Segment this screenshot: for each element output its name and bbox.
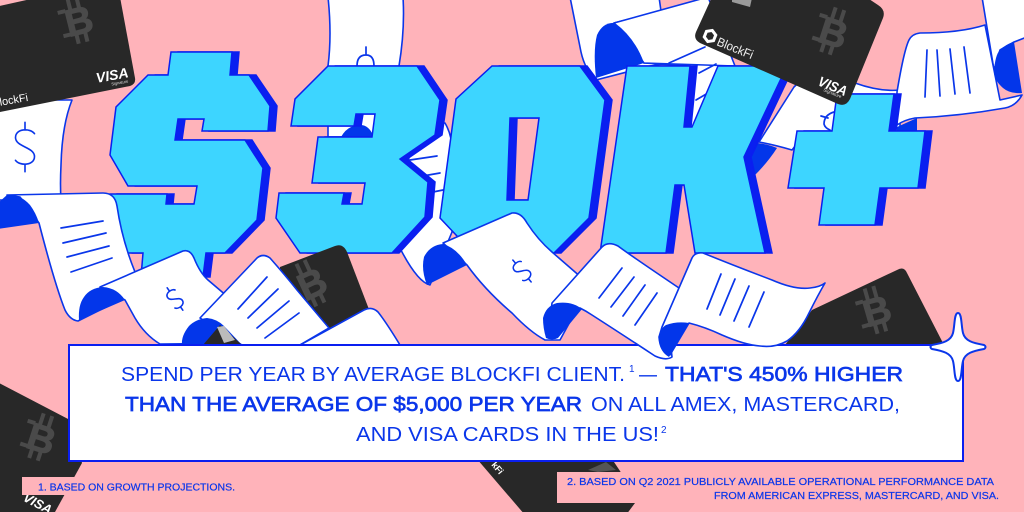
footnote 1 bbox=[22, 477, 237, 495]
footnote 2: 2. BASED ON Q2 2021 PUBLICLY AVAILABLE OPERATIONAL PERFORMANCE DATA bbox=[567, 477, 994, 488]
callout text line 1: 1 bbox=[629, 364, 635, 375]
receipt: top centre behind the 3 bbox=[328, 0, 404, 137]
receipt: front left with four lines bbox=[0, 193, 142, 321]
callout text line 2 bbox=[125, 393, 900, 416]
card: top right black BlockFi card: BlockFi bbox=[715, 35, 755, 62]
callout text line 1 bbox=[121, 363, 903, 386]
card: top right black BlockFi card bbox=[695, 0, 884, 105]
numeral: dollar sign bbox=[108, 52, 277, 277]
card: black card lower right bbox=[785, 269, 944, 345]
callout text line 3: AND VISA CARDS IN THE US! bbox=[356, 423, 659, 446]
icon: sparkle star bbox=[930, 313, 986, 381]
callout text line 1: — bbox=[639, 363, 657, 386]
footnote 2: FROM AMERICAN EXPRESS, MASTERCARD, AND VISA. bbox=[714, 491, 999, 502]
icon: bitcoin logo: B bbox=[291, 260, 334, 310]
numeral: 3 bbox=[276, 66, 447, 253]
card: black card bottom centre: kFi bbox=[489, 460, 505, 476]
icon: bitcoin logo: B bbox=[858, 288, 896, 336]
receipt: front with rotated dollar sign bbox=[79, 251, 250, 344]
receipt: top left with dollar sign bbox=[0, 100, 72, 200]
card: black card lower left bbox=[0, 382, 82, 512]
footnote 1: 1. BASED ON GROWTH PROJECTIONS. bbox=[38, 482, 235, 494]
card: black card behind lower receipts bbox=[280, 245, 370, 345]
receipt: far right with four lines bbox=[897, 0, 1024, 125]
callout text line 3: 2 bbox=[661, 425, 667, 436]
footnote 2 bbox=[557, 472, 1024, 503]
receipt: behind gap between 3 and 0 bbox=[395, 122, 452, 285]
card: top left black credit card: VISA bbox=[95, 64, 130, 86]
receipt: centre right with four lines, overlapping box bbox=[543, 244, 679, 359]
headline: $30K+ bbox=[108, 52, 932, 277]
callout text line 2: ON ALL AMEX, MASTERCARD, bbox=[591, 393, 900, 416]
card: top right black BlockFi card: Signature bbox=[823, 87, 843, 99]
receipt: front with slanted lines and card chip bbox=[182, 256, 329, 345]
numeral: K bbox=[600, 66, 794, 253]
callout box bbox=[69, 345, 963, 461]
card: top right black BlockFi card: VISA bbox=[816, 73, 850, 99]
symbol: plus bbox=[788, 94, 932, 225]
icon: bitcoin logo: B bbox=[814, 10, 853, 58]
card: top left black credit card: Signature bbox=[111, 78, 129, 86]
card: black card bottom centre bbox=[477, 459, 635, 512]
numeral: 0 bbox=[440, 66, 612, 253]
callout text line 1: THAT'S 450% HIGHER bbox=[665, 363, 903, 386]
receipt: large right with four lines, overlapping box bbox=[659, 253, 825, 357]
receipt: centre with rotated dollar sign bbox=[423, 213, 590, 340]
receipt: front small corner bbox=[300, 308, 400, 345]
icon: bitcoin logo: B bbox=[22, 416, 61, 464]
receipt: behind K and plus bbox=[748, 70, 917, 175]
card: top left black credit card bbox=[0, 0, 135, 113]
receipt: top right centre with blue curl bbox=[570, 0, 735, 130]
callout text line 2: THAN THE AVERAGE OF $5,000 PER YEAR bbox=[125, 393, 582, 416]
callout text line 1: SPEND PER YEAR BY AVERAGE BLOCKFI CLIENT. bbox=[121, 363, 625, 386]
